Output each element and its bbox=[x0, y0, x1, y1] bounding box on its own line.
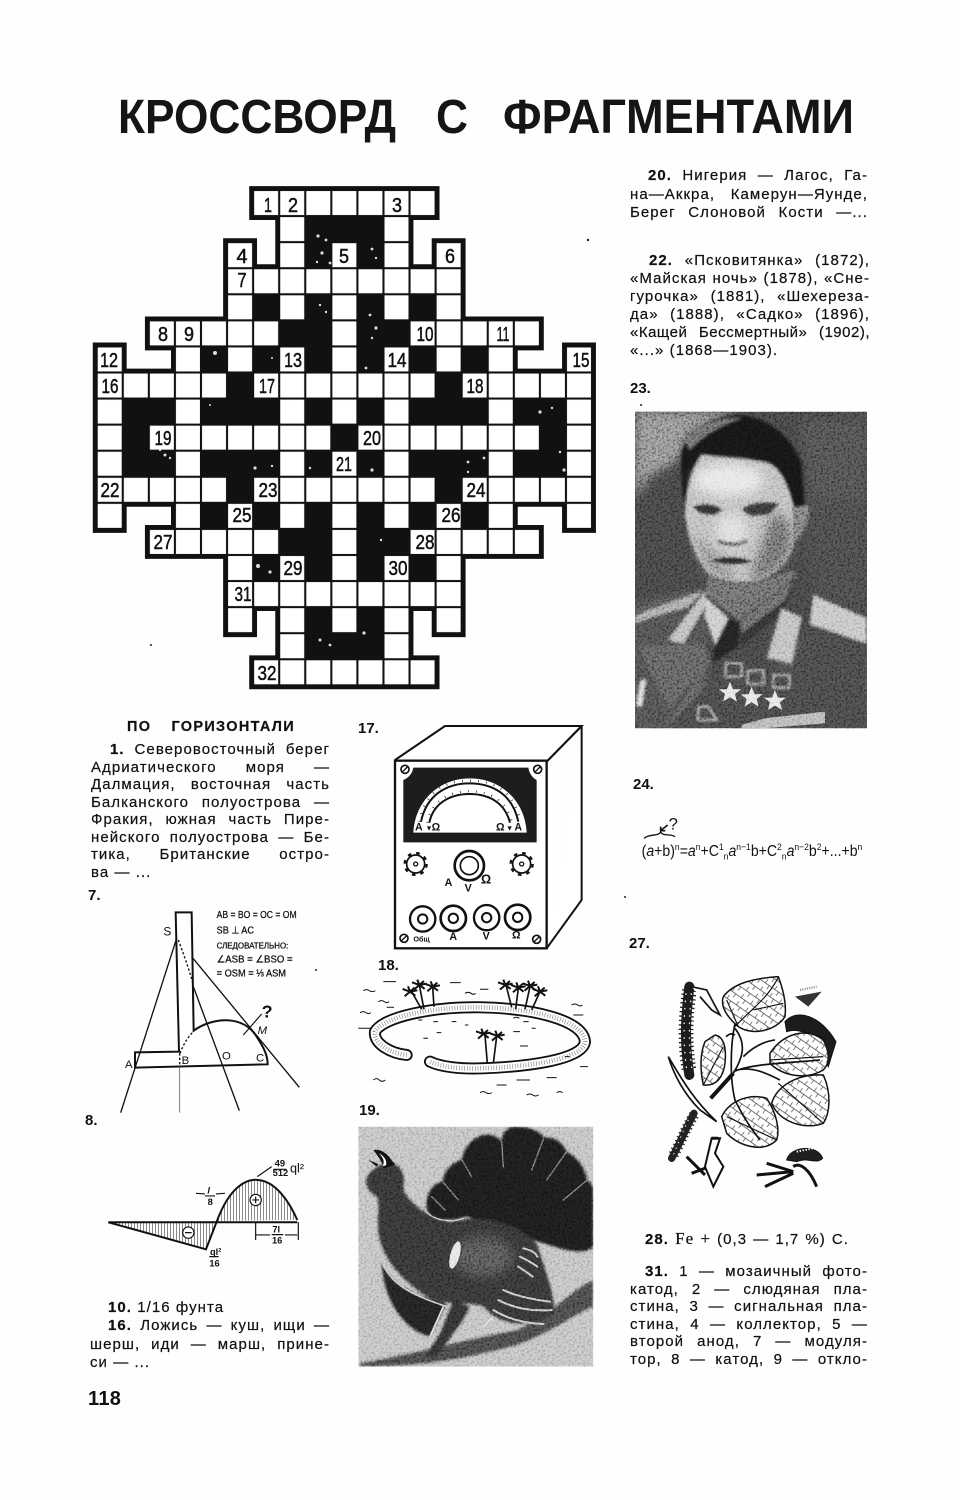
crossword numbers: 23 bbox=[258, 480, 278, 502]
voltmeter device: Ω bbox=[496, 822, 505, 834]
text block: clues 10 and 16 bbox=[90, 1299, 330, 1371]
crossword grid bbox=[97, 190, 592, 685]
crossword numbers: 32 bbox=[258, 663, 276, 685]
crossword numbers: 21 bbox=[336, 454, 352, 476]
voltmeter device: ▼ bbox=[506, 824, 513, 833]
binomial formula: b+C bbox=[751, 843, 777, 860]
crossword numbers: 16 bbox=[102, 376, 118, 398]
binomial formula: (a+b) bbox=[642, 843, 677, 860]
binomial formula: ? bbox=[669, 814, 678, 833]
voltmeter device: V bbox=[465, 882, 473, 894]
text block: clue 1: Далмация, восточная часть bbox=[91, 776, 330, 793]
diagram 7: set square on semicircle: A bbox=[125, 1059, 133, 1071]
text block: clue 22: 22. «Псковитянка» (1872), bbox=[649, 252, 870, 269]
voltmeter device: A bbox=[514, 822, 522, 834]
text block: clue 20: Берег Слоновой Кости —... bbox=[630, 204, 868, 221]
voltmeter device: V bbox=[483, 930, 491, 942]
label: 18: 18. bbox=[378, 957, 399, 974]
binomial formula: b bbox=[809, 843, 817, 860]
crossword numbers: 10 bbox=[416, 324, 434, 346]
binomial formula: a bbox=[728, 843, 736, 860]
crossword numbers: 13 bbox=[284, 350, 302, 372]
voltmeter device: ▼ bbox=[425, 824, 433, 833]
text block: clue 22: «Кащей Бессмертный» (1902), bbox=[630, 324, 870, 341]
diagram 7: set square on semicircle: SB ⊥ AC bbox=[217, 925, 254, 936]
label: 17: 17. bbox=[358, 720, 379, 737]
text block: clue 20 bbox=[630, 167, 868, 221]
text block: clue 22 bbox=[630, 252, 870, 359]
text block: clue 22: да» (1888), «Садко» (1896), bbox=[630, 306, 870, 323]
diagram 8: bending moment plot: 7l bbox=[272, 1225, 280, 1235]
title: ФРАГМЕНТАМИ bbox=[503, 91, 854, 144]
crossword numbers: 14 bbox=[388, 350, 406, 372]
diagram 8: bending moment plot: 16 bbox=[272, 1235, 282, 1245]
photo: portrait of officer bbox=[635, 412, 867, 728]
diagram 8: bending moment plot: 512 bbox=[273, 1168, 288, 1178]
diagram 7: set square on semicircle bbox=[121, 910, 299, 1113]
crossword numbers: 5 bbox=[339, 246, 349, 268]
label: 7: 7. bbox=[88, 887, 101, 904]
crossword numbers: 6 bbox=[445, 246, 455, 268]
title bbox=[118, 91, 854, 144]
crossword numbers: 17 bbox=[259, 376, 275, 398]
voltmeter device: Общ bbox=[413, 934, 431, 943]
diagram 8: bending moment plot: ql² bbox=[210, 1247, 221, 1257]
text block: clue 31: второй анод, 7 — модуля- bbox=[630, 1333, 868, 1350]
diagram 7: set square on semicircle: ∠ASB = ∠BSO = bbox=[217, 955, 293, 966]
text block: clues 10 and 16: шерш, иди — марш, прине- bbox=[90, 1336, 330, 1353]
diagram 8: bending moment plot: l bbox=[207, 1185, 210, 1195]
crossword numbers: 19 bbox=[154, 428, 172, 450]
text block: clue 20: на—Аккра, Камерун—Яунде, bbox=[630, 186, 868, 202]
crossword numbers: 29 bbox=[284, 558, 302, 580]
binomial formula: n bbox=[696, 842, 701, 852]
text block: clue 31: 31. 1 — мозаичный фото- bbox=[645, 1263, 868, 1280]
title: С bbox=[436, 91, 468, 144]
crossword numbers: 1 bbox=[264, 195, 272, 217]
text block: clue 1: Адриатического моря — bbox=[91, 758, 330, 776]
label: 19: 19. bbox=[359, 1102, 380, 1119]
atoll illustration bbox=[358, 980, 588, 1096]
stray print specks bbox=[150, 239, 642, 971]
binomial formula: n−1 bbox=[736, 842, 751, 852]
diagram 8: bending moment plot: 16 bbox=[209, 1259, 220, 1269]
binomial formula bbox=[642, 814, 862, 861]
binomial formula: n bbox=[782, 851, 787, 861]
crossword numbers: 3 bbox=[392, 195, 402, 217]
voltmeter device: A bbox=[445, 877, 453, 889]
crossword numbers: 25 bbox=[232, 505, 252, 527]
binomial formula: = bbox=[680, 843, 688, 860]
diagram 8: bending moment plot bbox=[108, 1159, 304, 1269]
crossword numbers: 31 bbox=[234, 584, 252, 606]
crossword numbers: 7 bbox=[238, 270, 246, 292]
illustrations canvas bbox=[92, 100, 867, 1367]
binomial formula: 1 bbox=[719, 842, 724, 852]
text block: clue 31: катод, 2 — слюдяная пла- bbox=[630, 1280, 868, 1298]
crossword numbers: 22 bbox=[100, 480, 120, 502]
title: КРОССВОРД bbox=[118, 91, 396, 144]
text block: clue 22: гурочка» (1881), «Шехереза- bbox=[630, 288, 870, 305]
page number: 118 bbox=[88, 1388, 121, 1410]
aspen branch botanical illustration bbox=[668, 977, 836, 1187]
diagram 7: set square on semicircle: S bbox=[163, 924, 171, 938]
photo: grouse bird bbox=[358, 1127, 593, 1367]
clue 28: 28. Fe + (0,3 — 1,7 %) С. bbox=[645, 1229, 849, 1248]
crossword numbers: 27 bbox=[154, 532, 172, 554]
text block: clue 22: «...» (1868—1903). bbox=[630, 342, 778, 359]
diagram 7: set square on semicircle: ? bbox=[262, 1001, 273, 1021]
crossword numbers: 28 bbox=[416, 532, 434, 554]
text block: clue 1: 1. Северовосточный берег bbox=[110, 741, 330, 758]
binomial formula: +C bbox=[701, 843, 719, 860]
text block: clue 31: тор, 8 — катод, 9 — откло- bbox=[630, 1350, 868, 1368]
text block: clue 31: стина, 3 — сигнальная пла- bbox=[630, 1298, 868, 1315]
diagram 8: bending moment plot: 49 bbox=[275, 1159, 285, 1169]
text block: clue 1: ва — ... bbox=[91, 864, 151, 880]
voltmeter device: Ω bbox=[481, 872, 491, 886]
crossword numbers: 20 bbox=[363, 428, 381, 450]
diagram 7: set square on semicircle: C bbox=[256, 1052, 264, 1064]
crossword numbers: 30 bbox=[388, 558, 408, 580]
binomial formula: 2 bbox=[777, 842, 782, 852]
binomial formula: a bbox=[688, 843, 696, 860]
binomial formula: a bbox=[787, 843, 794, 860]
binomial formula: n bbox=[858, 842, 862, 852]
crossword numbers: 2 bbox=[288, 195, 298, 217]
diagram 7: set square on semicircle: AB = BO = OC = OM bbox=[217, 910, 297, 921]
diagram 7: set square on semicircle: = OSM = ⅓ ASM bbox=[217, 969, 286, 980]
crossword numbers: 11 bbox=[496, 324, 510, 346]
diagram 7: set square on semicircle: O bbox=[222, 1050, 231, 1062]
binomial formula: +...+b bbox=[822, 843, 858, 860]
crossword numbers: 15 bbox=[572, 350, 590, 372]
text block: clue 1: Балканского полуострова — bbox=[91, 794, 330, 810]
crossword numbers: 4 bbox=[236, 246, 248, 268]
crossword numbers: 18 bbox=[466, 376, 484, 398]
binomial formula: 2 bbox=[817, 842, 822, 852]
text block: clues 10 and 16: си — ... bbox=[90, 1354, 150, 1371]
crossword numbers: 12 bbox=[100, 350, 118, 372]
label: 24: 24. bbox=[633, 776, 654, 793]
text block: clue 1 bbox=[90, 741, 330, 880]
diagram 8: bending moment plot: ql² bbox=[290, 1162, 304, 1176]
text block: clue 1: Фракия, южная часть Пире- bbox=[91, 811, 330, 828]
voltmeter device: A bbox=[449, 931, 457, 943]
voltmeter device bbox=[395, 726, 582, 948]
diagram 7: set square on semicircle: M bbox=[258, 1025, 268, 1037]
text block: clue 1: нейского полуострова — Бе- bbox=[91, 828, 330, 846]
voltmeter device: Ω bbox=[512, 930, 521, 942]
diagram 7: set square on semicircle: СЛЕДОВАТЕЛЬНО: bbox=[217, 942, 288, 951]
text block: clues 10 and 16: 16. Ложись — куш, ищи — bbox=[108, 1317, 330, 1334]
label: 23: 23. bbox=[630, 380, 651, 397]
binomial formula: n bbox=[724, 851, 728, 861]
binomial formula: n−2 bbox=[794, 842, 809, 852]
voltmeter device: A bbox=[415, 822, 423, 834]
crossword numbers: 9 bbox=[184, 324, 194, 346]
voltmeter device: Ω bbox=[432, 822, 441, 834]
crossword numbers: 8 bbox=[158, 324, 168, 346]
label: 27: 27. bbox=[629, 935, 650, 952]
text block: clue 20: 20. Нигерия — Лагос, Га- bbox=[648, 167, 868, 184]
diagram 8: bending moment plot: 8 bbox=[208, 1197, 213, 1207]
text block: clue 1: тика, Британские остро- bbox=[91, 846, 330, 863]
crossword numbers bbox=[100, 195, 590, 685]
crossword numbers: 24 bbox=[466, 480, 486, 502]
text block: clue 22: «Майская ночь» (1878), «Сне- bbox=[630, 270, 870, 287]
text block: clue 31 bbox=[630, 1263, 868, 1368]
heading: across: ПО ГОРИЗОНТАЛИ bbox=[127, 719, 295, 735]
text block: clues 10 and 16: 10. 1/16 фунта bbox=[108, 1299, 224, 1316]
binomial formula: n bbox=[675, 842, 680, 852]
label: 8: 8. bbox=[85, 1112, 98, 1129]
diagram 7: set square on semicircle: B bbox=[182, 1055, 189, 1067]
crossword numbers: 26 bbox=[442, 505, 460, 527]
text block: clue 31: стина, 4 — коллектор, 5 — bbox=[630, 1316, 868, 1332]
